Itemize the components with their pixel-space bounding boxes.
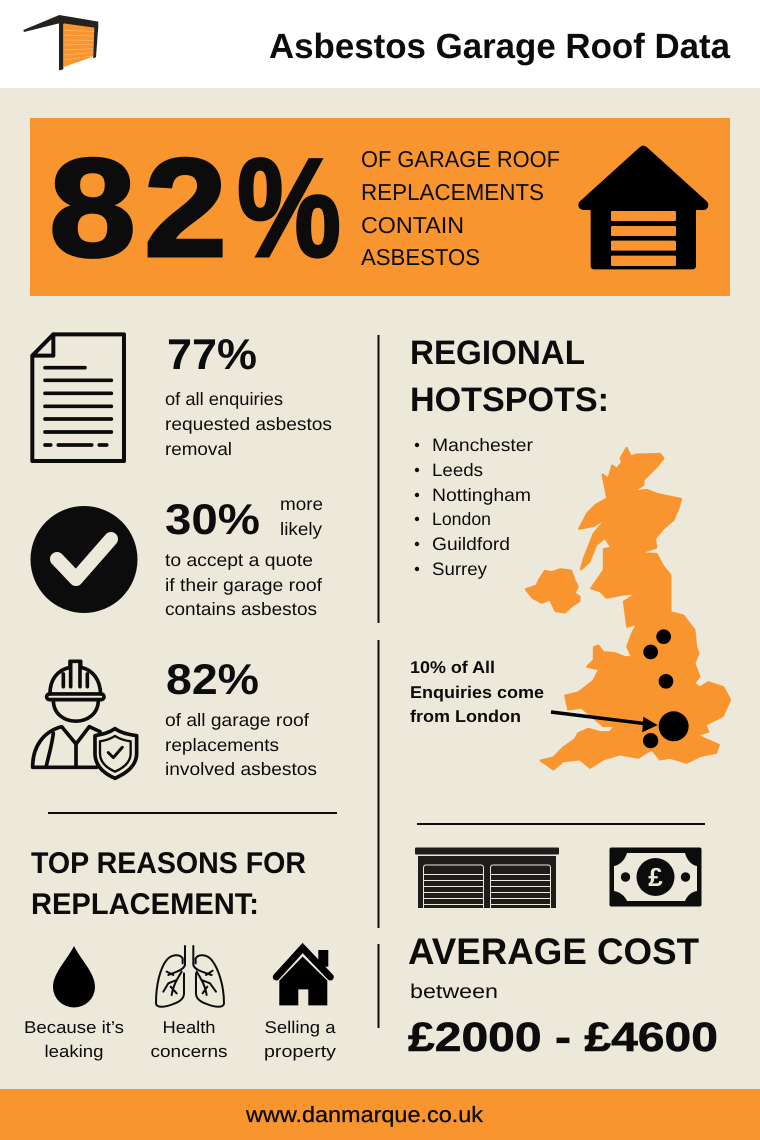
- icon: double garage: [415, 848, 559, 908]
- heading: top reasons: REPLACEMENT:: [31, 888, 259, 921]
- panel: headline statistic banner: [30, 118, 730, 296]
- list: hotspot cities: Guildford: [432, 534, 510, 554]
- average cost: [408, 931, 718, 1060]
- icon: document: [32, 334, 124, 461]
- reason: leaking: leaking: [44, 1042, 104, 1061]
- arrow: to London: [551, 712, 656, 731]
- reason: leaking: Because it’s: [24, 1018, 124, 1037]
- big number 82%: [49, 129, 341, 286]
- stat: 77% of enquiries: of all enquiries: [165, 389, 283, 409]
- icon: garage logo: [23, 15, 98, 70]
- callout: London share: Enquiries come: [410, 683, 544, 702]
- stat: 30% more likely: likely: [280, 519, 322, 539]
- banner text: [361, 146, 560, 270]
- list: hotspot cities: Nottingham: [432, 485, 531, 505]
- icon: house: [276, 948, 330, 1005]
- list: hotspot cities: Surrey: [432, 559, 487, 579]
- stat: 30% more likely: more: [280, 494, 323, 514]
- heading: regional hotspots: [410, 334, 609, 419]
- list: hotspot cities: Leeds: [432, 460, 483, 480]
- stat: 82% involved asbestos: replacements: [165, 735, 279, 755]
- callout: London share: from London: [410, 707, 521, 726]
- stat: 82% involved asbestos: 82%: [166, 656, 259, 704]
- icon: water drop: [53, 946, 95, 1007]
- average cost: £2000 - £4600: [408, 1014, 718, 1060]
- stat: 77% of enquiries: requested asbestos: [165, 414, 332, 434]
- map: UK with hotspots: [526, 448, 730, 769]
- stat: 82% involved asbestos: of all garage roof: [165, 710, 310, 730]
- icon: banknote: [610, 848, 702, 906]
- reason: leaking: [24, 946, 124, 1061]
- icon: check mark: [30, 506, 138, 613]
- heading: regional hotspots: HOTSPOTS:: [410, 381, 609, 419]
- reason: selling: property: [264, 1042, 337, 1061]
- reason: health: [150, 946, 228, 1061]
- stat: 30% more likely: [165, 494, 323, 619]
- hotspot markers: [643, 629, 689, 748]
- stat: 77% of enquiries: removal: [165, 439, 232, 459]
- reason: health: concerns: [150, 1042, 228, 1061]
- reason: health: Health: [162, 1018, 216, 1037]
- reason: selling: Selling a: [264, 1018, 336, 1037]
- heading: top reasons: [31, 847, 306, 921]
- banner text: ASBESTOS: [361, 244, 480, 270]
- banner text: OF GARAGE ROOF: [361, 146, 560, 172]
- icon: worker with shield: [33, 661, 137, 778]
- big number 82%: 8: [49, 129, 136, 286]
- heading: top reasons: TOP REASONS FOR: [31, 847, 306, 880]
- stat: 30% more likely: to accept a quote: [165, 550, 313, 570]
- northern ireland: [526, 569, 579, 612]
- stat: 30% more likely: if their garage roof: [165, 575, 323, 595]
- icon: lungs: [156, 946, 224, 1007]
- list: hotspot cities: [415, 435, 533, 579]
- reason: selling: [264, 948, 337, 1061]
- banner text: CONTAIN: [361, 212, 464, 238]
- footer: [0, 1089, 760, 1140]
- big number 82%: 2: [144, 129, 227, 286]
- icon: garage: [583, 151, 703, 269]
- stat: 30% more likely: contains asbestos: [165, 599, 317, 619]
- banner text: REPLACEMENTS: [361, 179, 544, 205]
- stat: 30% more likely: 30%: [165, 496, 260, 544]
- list: hotspot cities: London: [432, 509, 491, 529]
- stat: 77% of enquiries: [165, 331, 332, 459]
- stat: 82% involved asbestos: involved asbestos: [165, 759, 317, 779]
- big number 82%: %: [237, 129, 341, 286]
- average cost: AVERAGE COST: [408, 931, 699, 972]
- header: [0, 0, 760, 88]
- icon: banknote: £: [648, 862, 663, 892]
- heading: regional hotspots: REGIONAL: [410, 334, 585, 372]
- title: Asbestos Garage Roof Data: [269, 27, 731, 66]
- stat: 82% involved asbestos: [165, 656, 317, 779]
- average cost: between: [410, 981, 498, 1003]
- footer: www.danmarque.co.uk: [245, 1102, 484, 1127]
- callout: London share: [410, 658, 544, 726]
- callout: London share: 10% of All: [410, 658, 495, 677]
- stat: 77% of enquiries: 77%: [167, 331, 257, 379]
- great britain: [541, 448, 730, 769]
- list: hotspot cities: Manchester: [432, 435, 533, 455]
